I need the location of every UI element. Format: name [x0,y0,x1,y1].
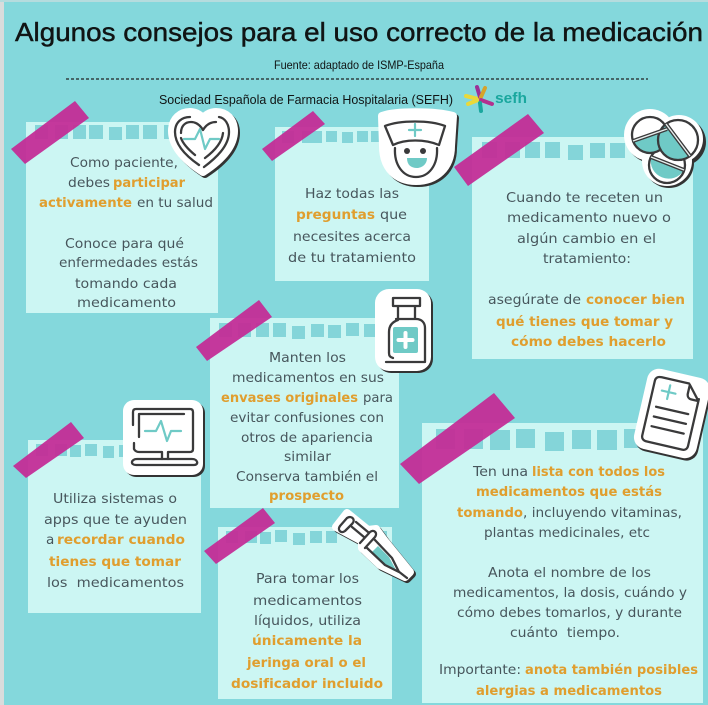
text block: algún cambio en el [517,231,656,247]
text block: lista con todos los [532,464,665,480]
text block: qué tienes que tomar y [496,314,673,330]
text block: líquidos, utiliza [254,613,361,629]
text block: medicamentos que estás [476,484,662,500]
text block: cuánto tiempo. [510,625,620,641]
text block: Cuando te receten un [506,190,663,206]
panel: envases originales [196,300,399,508]
title: Algunos consejos para el uso correcto de la medicación [15,17,703,47]
text block: Utiliza sistemas o [53,491,177,507]
text block: Conserva también el [236,469,378,485]
text block: tienes que tomar [49,554,181,570]
text block [488,190,685,350]
icon: heart with pulse [172,112,236,174]
text block: para [363,390,393,406]
text block: medicamentos, la dosis, cuándo y [453,585,687,601]
panel: recordar [13,422,201,613]
text block: necesites acerca [293,229,411,245]
text block: debes [68,175,110,191]
tape [196,300,272,361]
text block: Conoce para qué [65,236,184,252]
text block: prospecto [269,488,344,504]
source line: Fuente: adaptado de ISMP-España [274,58,444,72]
text block [288,186,416,266]
text block: alergias a medicamentos [476,683,662,699]
text block: Anota el nombre de los [488,565,651,581]
panel: preguntas [262,111,429,281]
text block: recordar cuando [57,532,185,548]
text block: dosificador incluido [231,676,383,692]
text block: Para tomar los [256,571,359,587]
text block: jeringa oral o el [246,655,366,671]
text block: conocer bien [586,292,685,308]
logo: sefh: sefh [495,90,527,107]
text block: medicamentos en sus [232,370,384,386]
text block: evitar confusiones con [230,410,384,426]
text block: cómo debes tomarlos, y durante [457,605,682,621]
tape [13,422,84,478]
text block [231,571,383,692]
panel: lista de medicamentos [400,393,703,703]
text block: tomando [457,505,523,521]
organisation line: Sociedad Española de Farmacia Hospitalaria (SEFH) [159,93,453,107]
text block: únicamente la [252,633,362,649]
text block [44,491,187,591]
text block: tomando cada [75,276,177,292]
text block: activamente [39,195,132,211]
icon: nurse [382,112,455,183]
text block: envases originales [221,390,358,406]
text block: asegúrate de [488,292,581,308]
panel: participar activamente [11,101,218,313]
tape [262,111,325,161]
text block: apps que te ayuden [44,512,187,528]
text block: cómo debes hacerlo [511,334,666,350]
text block [39,155,213,311]
text block: Haz todas las [305,186,399,202]
text block: plantas medicinales, etc [484,525,650,541]
text block: de tu tratamiento [288,250,416,266]
icon: document [631,366,708,463]
tape [204,508,275,564]
text block [439,464,698,699]
text block: en tu salud [137,195,213,211]
text block: participar [113,175,185,191]
text block: a [46,532,54,548]
text block: Como paciente, [70,155,178,171]
icon: pills [624,109,706,188]
text block: tratamiento: [543,251,631,267]
text block: que [380,207,407,223]
icon: syringe [336,513,412,579]
text block: , incluyendo vitaminas, [523,505,682,521]
panel: nuevo medicamento [454,114,693,359]
text block: Manten los [269,350,346,366]
text block: otros de apariencia [241,430,373,446]
text block [221,350,393,504]
icon: monitor with pulse [123,400,205,477]
text block: anota también posibles [525,662,698,678]
text block: Ten una [472,464,528,480]
tape [11,101,89,164]
text block: medicamento nuevo o [507,210,671,226]
panel: jeringa oral [204,508,392,699]
text block: los medicamentos [47,575,184,591]
text block: medicamentos [253,593,362,609]
tape [400,393,515,484]
tape [454,114,544,186]
icon: medicine bottle [375,289,433,373]
text block: similar [284,449,331,465]
text block: Importante: [439,662,521,678]
text block: preguntas [296,207,375,223]
text block: enfermedades estás [59,255,198,271]
logo: sefh [466,87,527,111]
text block: medicamento [77,295,176,311]
